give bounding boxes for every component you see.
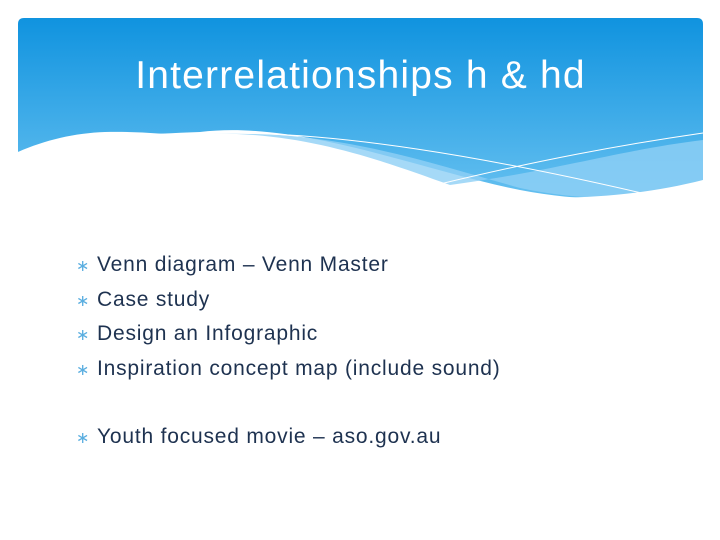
bullet list: ∗ <box>76 430 89 447</box>
bullet list: ∗ <box>76 258 89 275</box>
bullet list: ∗ <box>76 327 89 344</box>
bullet list <box>76 253 501 448</box>
bullet list: Youth focused movie – aso.gov.au <box>97 425 441 448</box>
title: Interrelationships h & hd <box>135 54 586 97</box>
bullet list: ∗ <box>76 292 89 310</box>
bullet list: Case study <box>97 288 210 310</box>
bullet list: Inspiration concept map (include sound) <box>97 356 501 380</box>
bullet list: ∗ <box>76 362 89 378</box>
bullet list: Design an Infographic <box>97 322 318 345</box>
bullet list: Venn diagram – Venn Master <box>97 253 389 276</box>
header banner <box>18 18 703 198</box>
